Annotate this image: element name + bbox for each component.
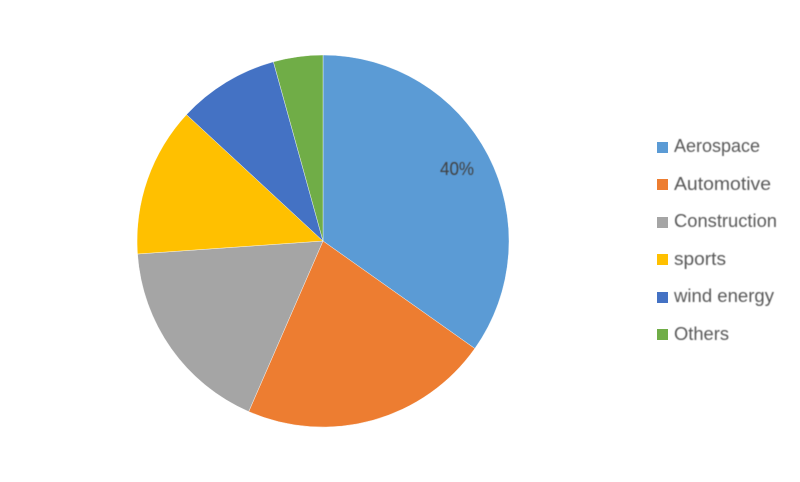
legend item: Aerospace: Aerospace	[674, 136, 760, 156]
slice: Construction	[138, 241, 323, 412]
slice: sports	[137, 115, 323, 254]
slice: Others	[273, 55, 323, 241]
legend item: sports: sports	[674, 249, 726, 269]
legend item: Others: Others	[674, 324, 729, 344]
legend item: Construction: Construction	[674, 211, 777, 231]
legend	[657, 136, 777, 344]
pie chart	[137, 55, 509, 427]
legend item: Automotive: Automotive	[674, 174, 771, 194]
legend item: wind energy: wind energy	[673, 286, 774, 306]
slice: Aerospace	[323, 55, 509, 348]
data label: 40%: 40%	[440, 159, 474, 179]
slice: Automotive	[249, 241, 475, 427]
slice: wind energy	[186, 62, 323, 241]
